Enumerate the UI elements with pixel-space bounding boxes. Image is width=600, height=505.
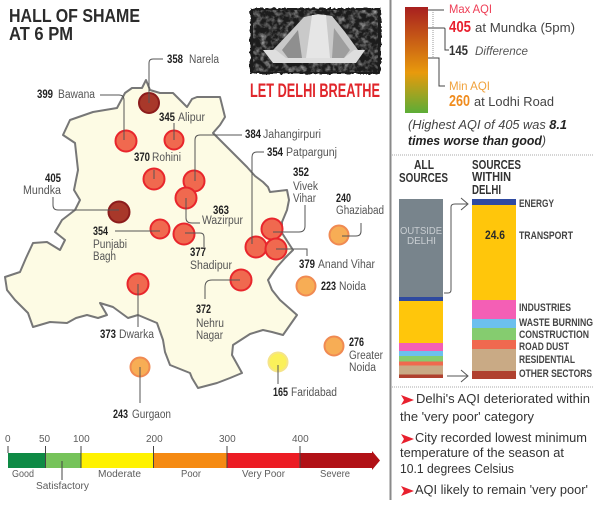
map: station labels: Dwarka <box>119 329 155 341</box>
panel: max and min AQI: Min AQI <box>449 79 490 93</box>
panel: max and min AQI: Difference <box>475 44 528 58</box>
icon: let delhi breathe lotus temple logo <box>250 8 381 102</box>
map: station labels: Faridabad <box>291 387 337 399</box>
text block: key points: temperature of the season at <box>400 445 564 460</box>
map: station labels: Patpargunj <box>286 147 337 159</box>
map: station labels: 373 <box>100 329 116 341</box>
map: station labels: Nehru <box>196 318 224 330</box>
sector labels <box>519 198 593 380</box>
legend: AQI colour scale: 50 <box>39 434 51 445</box>
panel: max and min AQI: 260 <box>449 93 470 110</box>
stacked bar: sources within delhi: 24.6 <box>485 228 505 242</box>
legend: AQI colour scale: 100 <box>73 434 90 445</box>
heading: sources within delhi: SOURCES <box>472 158 521 172</box>
legend: AQI colour scale: Satisfactory <box>36 481 89 492</box>
legend: AQI colour scale: 0 <box>5 434 11 445</box>
panel: max and min AQI <box>405 2 575 113</box>
stacked bar: all sources <box>399 199 443 378</box>
map: station labels: 399 <box>37 89 53 101</box>
map: leader lines <box>53 59 361 403</box>
text block: key points: City recorded lowest minimum <box>415 430 587 445</box>
sector labels: RESIDENTIAL <box>519 354 575 366</box>
callout: times worse than good <box>408 117 567 148</box>
panel: max and min AQI: Max AQI <box>449 2 492 16</box>
title: HALL OF SHAME <box>9 6 140 26</box>
heading: all sources <box>399 158 448 185</box>
map: station labels: 165 <box>273 387 288 399</box>
arrows linking the bars <box>444 198 468 382</box>
map: station labels: Noida <box>349 362 377 374</box>
map: station labels: Greater <box>349 350 383 362</box>
legend: AQI colour scale: Very Poor <box>242 469 286 480</box>
map: station labels: Ghaziabad <box>336 205 384 217</box>
legend: AQI colour scale: Moderate <box>98 469 141 480</box>
text block: key points: AQI likely to remain 'very poor' <box>415 482 588 497</box>
map: station labels: Rohini <box>152 152 181 164</box>
map: station labels: 405 <box>45 173 62 185</box>
text block: key points <box>400 391 590 497</box>
map: Delhi outline <box>5 80 297 388</box>
text block: key points: 10.1 degrees Celsius <box>400 461 514 476</box>
legend: AQI colour scale: Severe <box>320 469 350 480</box>
legend: AQI colour scale: 200 <box>146 434 163 445</box>
sector labels: ENERGY <box>519 198 554 210</box>
map: station labels: Gurgaon <box>132 409 171 421</box>
title: AT 6 PM <box>9 24 73 44</box>
heading: sources within delhi: WITHIN <box>472 170 511 184</box>
map: station labels: Wazirpur <box>202 215 243 227</box>
map: station labels: Vivek <box>293 181 318 193</box>
map: station labels: Vihar <box>293 193 316 205</box>
sector labels: INDUSTRIES <box>519 302 571 314</box>
heading: all sources: SOURCES <box>399 171 448 185</box>
heading: all sources: ALL <box>414 158 434 172</box>
map: station labels: Bagh <box>93 251 116 263</box>
map: station labels: Punjabi <box>93 239 127 251</box>
text block: key points: Delhi's AQI deteriorated within <box>416 391 590 406</box>
map: station labels: 354 <box>93 226 108 238</box>
map: station labels: Nagar <box>196 330 223 342</box>
legend: AQI colour scale: 400 <box>292 434 309 445</box>
callout: times worse than good: (Highest AQI of 405 was 8.1 <box>408 117 567 132</box>
map: station labels: 243 <box>113 409 128 421</box>
map: station labels: 358 <box>167 54 184 66</box>
panel: max and min AQI: 405 <box>449 19 471 36</box>
map: station labels: 240 <box>336 193 351 205</box>
map: station labels: 370 <box>134 152 150 164</box>
map: station labels <box>23 54 384 421</box>
legend: AQI colour scale: Good <box>12 469 34 480</box>
map: station labels: Mundka <box>23 185 62 197</box>
map: station labels: Narela <box>189 54 220 66</box>
panel: max and min AQI: at Mundka (5pm) <box>475 20 575 35</box>
map: station labels: Shadipur <box>190 260 232 272</box>
stacked bar: all sources: OUTSIDE <box>400 225 442 237</box>
panel: max and min AQI: at Lodhi Road <box>474 94 554 109</box>
map: station labels: Noida <box>339 281 367 293</box>
icon: let delhi breathe lotus temple logo: LET DELHI BREATHE <box>250 81 380 102</box>
legend: AQI colour scale: Poor <box>181 469 202 480</box>
map: station labels: 345 <box>159 112 176 124</box>
panel: pollution sources <box>399 158 593 382</box>
map: station labels: 379 <box>299 259 315 271</box>
legend: AQI colour scale <box>5 434 380 492</box>
panel: max and min AQI: 145 <box>449 42 468 58</box>
heading: sources within delhi <box>472 158 521 197</box>
legend: AQI colour scale: 300 <box>219 434 236 445</box>
map: station labels: Bawana <box>58 89 96 101</box>
map: station labels: 372 <box>196 304 211 316</box>
sector labels: ROAD DUST <box>519 341 569 353</box>
map: station labels: 223 <box>321 281 336 293</box>
stacked bar: all sources: DELHI <box>407 235 436 247</box>
map: station labels: 354 <box>267 147 284 159</box>
text block: key points: the 'very poor' category <box>400 409 534 424</box>
map: station labels: Alipur <box>178 112 205 124</box>
map: station labels: 377 <box>190 247 206 259</box>
map: station labels: 352 <box>293 167 309 179</box>
map: station labels: Jahangirpuri <box>263 129 321 141</box>
heading: sources within delhi: DELHI <box>472 183 501 197</box>
stacked bar: sources within delhi <box>472 199 516 379</box>
sector labels: TRANSPORT <box>519 230 573 242</box>
map: station labels: Anand Vihar <box>318 259 375 271</box>
map: station labels: 363 <box>213 205 229 217</box>
map: station labels: 384 <box>245 129 262 141</box>
title <box>9 6 140 44</box>
callout: times worse than good: times worse than good) <box>408 133 546 148</box>
map: AQI station circles <box>108 93 348 376</box>
column divider <box>390 0 392 500</box>
map: station labels: 276 <box>349 337 364 349</box>
